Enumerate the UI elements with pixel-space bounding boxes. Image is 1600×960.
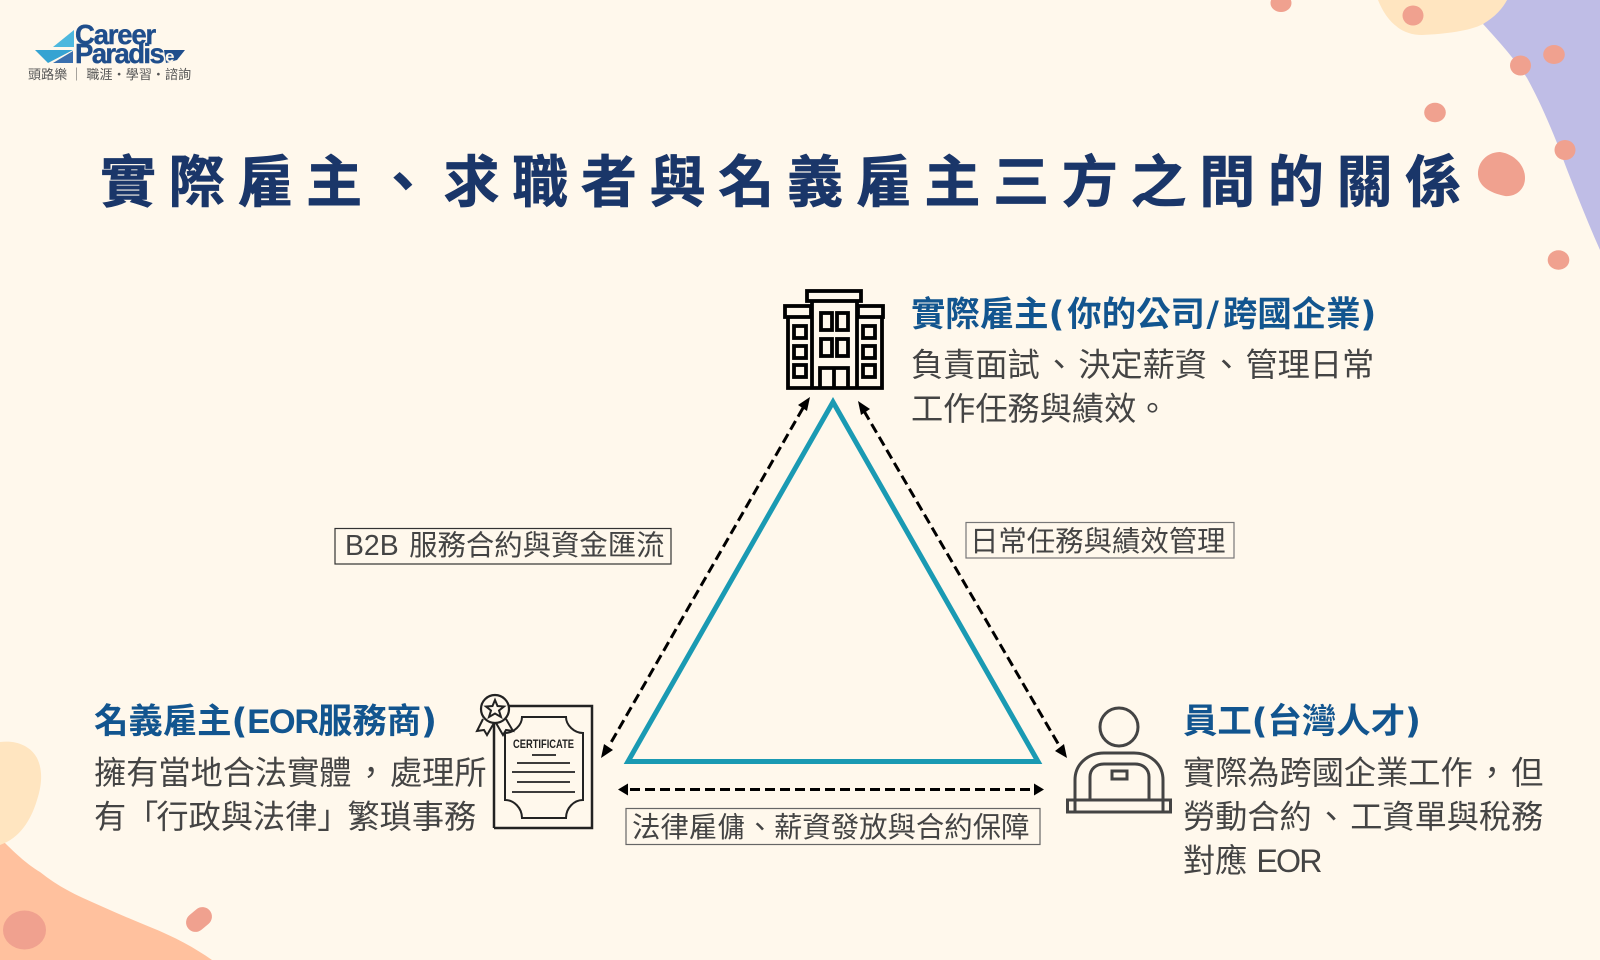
- label: B2B contract: B2B 服務合約與資金匯流: [345, 530, 665, 562]
- arrow: left side double-headed: [601, 397, 810, 758]
- text: employee: 勞動合約、工資單與稅務: [1183, 799, 1543, 835]
- logo: Career Paradise: [28, 19, 191, 83]
- text: employee: 對應 EOR: [1183, 843, 1321, 879]
- logo tagline: 頭路樂 ｜ 職涯・學習・諮詢: [28, 64, 191, 83]
- label: daily tasks: 日常任務與績效管理: [970, 526, 1226, 558]
- text: employee: 實際為跨國企業工作，但: [1183, 755, 1543, 791]
- text: EOR: 有「行政與法律」繁瑣事務: [94, 799, 476, 835]
- icon: office building: [785, 291, 883, 388]
- logo wordmark: Career: [75, 19, 156, 50]
- text: employee: 員工(台灣人才): [1183, 702, 1421, 742]
- text: EOR: 名義雇主(EOR服務商): [94, 702, 437, 742]
- title: 實際雇主、求職者與名義雇主三方之間的關係: [100, 138, 1474, 219]
- logo wordmark: Paradis: [75, 38, 164, 69]
- text: EOR: 擁有當地合法實體，處理所: [94, 755, 487, 791]
- icon: certificate: CERTIFICATE: [513, 739, 574, 751]
- decorative blobs: top right: [1270, 0, 1600, 270]
- triangle: [628, 402, 1038, 762]
- text: employee: [1183, 702, 1543, 879]
- text: EOR: [94, 702, 487, 835]
- text: actual employer: 負責面試、決定薪資、管理日常: [911, 347, 1374, 383]
- text: actual employer: 工作任務與績效。: [911, 391, 1168, 427]
- logo wordmark: e: [165, 47, 174, 66]
- icon: paper boat: [35, 30, 74, 63]
- decorative blobs: bottom left: [0, 742, 216, 960]
- arrow: right side double-headed: [858, 401, 1067, 758]
- text: actual employer: 實際雇主(你的公司/跨國企業): [911, 295, 1376, 335]
- icon: certificate: [477, 695, 592, 828]
- arrow: bottom double-headed: [618, 784, 1044, 796]
- text: actual employer: [911, 295, 1376, 427]
- icon: employee at laptop: [1068, 708, 1170, 812]
- label: legal employment: 法律雇傭、薪資發放與合約保障: [632, 812, 1029, 844]
- logo wordmark: [75, 19, 185, 69]
- icon: ribbon seal: [477, 695, 513, 735]
